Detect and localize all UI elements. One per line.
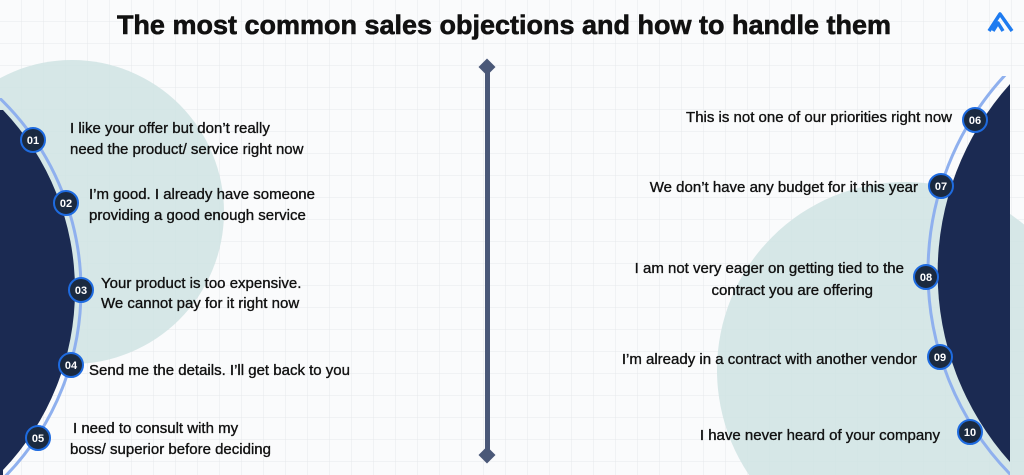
badges: 07: [935, 181, 947, 193]
objections right: I am not very eager on getting tied to the: [635, 260, 904, 277]
objections left: Send me the details. I’ll get back to you: [89, 362, 350, 379]
right dark arc shape: [926, 76, 1010, 475]
badges: 08: [920, 272, 932, 284]
objections left: I like your offer but don’t really: [70, 120, 270, 137]
badges: 06: [969, 115, 981, 127]
badges: 02: [60, 198, 72, 210]
objections right: contract you are offering: [712, 282, 873, 299]
badges: 03: [75, 285, 87, 297]
title: The most common sales objections and how to handle them: [117, 10, 891, 40]
objections right: I’m already in a contract with another vendor: [622, 351, 917, 368]
objections left: providing a good enough service: [89, 207, 306, 224]
objections right: We don’t have any budget for it this year: [650, 179, 918, 196]
objections right: [622, 109, 952, 444]
objections left: Your product is too expensive.: [101, 275, 301, 292]
objections left: need the product/ service right now: [70, 141, 304, 158]
objections left: I’m good. I already have someone: [89, 186, 315, 203]
objections left: I need to consult with my: [73, 420, 239, 437]
objections left: [70, 120, 350, 458]
objections right: This is not one of our priorities right now: [686, 109, 952, 126]
badges: 05: [32, 433, 44, 445]
logo icon: [989, 14, 1012, 31]
objections left: boss/ superior before deciding: [70, 441, 271, 458]
badges: 09: [934, 352, 946, 364]
objections left: We cannot pay for it right now: [101, 295, 299, 312]
center divider line: [479, 59, 495, 463]
background circle left: [0, 60, 224, 364]
background circle right: [717, 182, 1024, 475]
badges: [21, 108, 987, 450]
left dark arc shape: [0, 98, 82, 475]
badges: 10: [964, 427, 976, 439]
badges: 04: [65, 360, 78, 372]
badges: 01: [27, 135, 39, 147]
objections right: I have never heard of your company: [700, 427, 940, 444]
